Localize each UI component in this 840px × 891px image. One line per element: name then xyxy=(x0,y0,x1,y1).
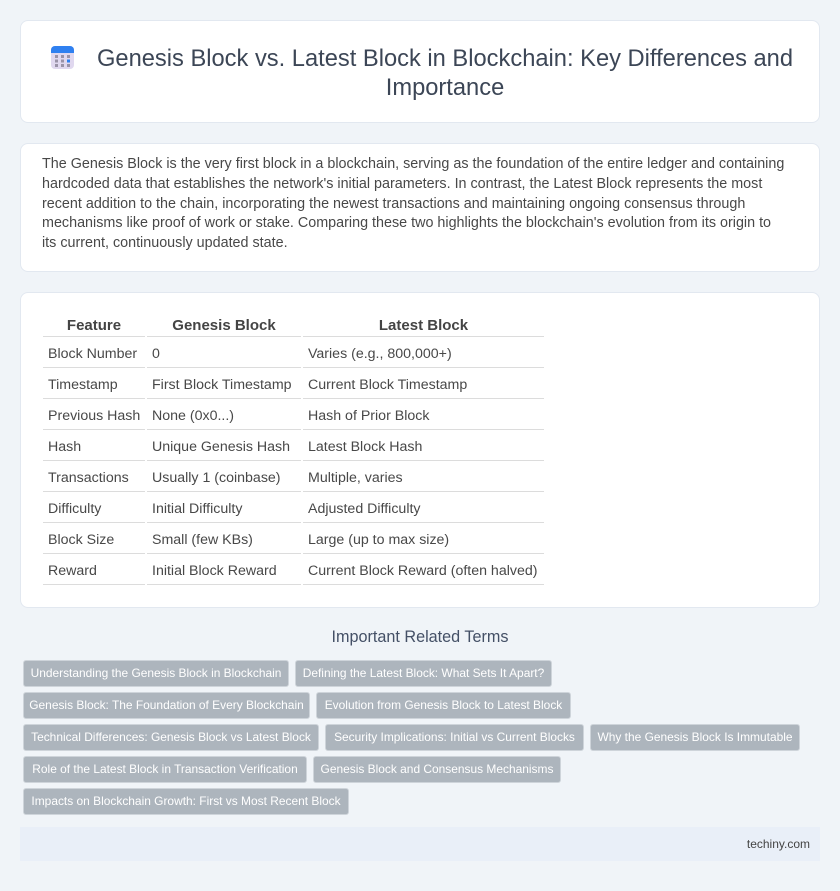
comparison table: Usually 1 (coinbase) xyxy=(152,470,281,486)
intro panel xyxy=(20,143,820,272)
comparison table: Current Block Reward (often halved) xyxy=(308,563,537,579)
comparison table: Block Size xyxy=(48,532,114,548)
table panel xyxy=(20,292,820,608)
comparison table xyxy=(43,317,544,585)
comparison table: Unique Genesis Hash xyxy=(152,439,290,455)
comparison table: Transactions xyxy=(48,470,129,486)
related term tags: Genesis Block and Consensus Mechanisms xyxy=(321,762,553,776)
related term tags: Security Implications: Initial vs Current Blocks xyxy=(334,730,575,744)
related terms heading: Important Related Terms xyxy=(332,628,508,646)
comparison table: Hash of Prior Block xyxy=(308,408,429,424)
comparison table: Adjusted Difficulty xyxy=(308,501,421,517)
comparison table: Difficulty xyxy=(48,501,101,517)
intro text: its current, continuously updated state. xyxy=(42,235,288,251)
intro text: The Genesis Block is the very first block in a blockchain, serving as the foundation of the entire ledger and containing xyxy=(42,156,784,172)
comparison table: Feature xyxy=(67,317,121,334)
related term tags xyxy=(23,660,800,815)
footer bar xyxy=(20,827,820,861)
header panel xyxy=(20,20,820,123)
comparison table: Timestamp xyxy=(48,377,118,393)
comparison table: Reward xyxy=(48,563,97,579)
related term tags: Impacts on Blockchain Growth: First vs Most Recent Block xyxy=(31,794,341,808)
footer source: techiny.com xyxy=(747,837,810,851)
related term tags: Why the Genesis Block Is Immutable xyxy=(597,730,793,744)
related term tags: Genesis Block: The Foundation of Every Blockchain xyxy=(29,698,304,712)
comparison table: Varies (e.g., 800,000+) xyxy=(308,346,452,362)
comparison table: None (0x0...) xyxy=(152,408,234,424)
related term tags: Technical Differences: Genesis Block vs Latest Block xyxy=(31,730,311,744)
related term tags: Role of the Latest Block in Transaction Verification xyxy=(32,762,298,776)
comparison table: Small (few KBs) xyxy=(152,532,253,548)
intro text: hardcoded data that establishes the network's initial parameters. In contrast, the Latest Block represents the most xyxy=(42,176,762,192)
comparison table: Block Number xyxy=(48,346,137,362)
comparison table: Current Block Timestamp xyxy=(308,377,467,393)
comparison table: Latest Block Hash xyxy=(308,439,422,455)
intro text: recent addition to the chain, incorporating the newest transactions and maintaining ongoing consensus through xyxy=(42,196,745,212)
comparison table: Initial Block Reward xyxy=(152,563,277,579)
icon: calendar xyxy=(51,46,74,69)
comparison table: Large (up to max size) xyxy=(308,532,449,548)
title: Importance xyxy=(386,75,504,101)
title: Genesis Block vs. Latest Block in Blockchain: Key Differences and xyxy=(97,46,793,72)
comparison table: Previous Hash xyxy=(48,408,140,424)
title xyxy=(97,46,793,101)
comparison table: Hash xyxy=(48,439,81,455)
related term tags: Understanding the Genesis Block in Blockchain xyxy=(31,666,281,680)
related term tags: Evolution from Genesis Block to Latest Block xyxy=(325,698,562,712)
comparison table: Genesis Block xyxy=(172,317,276,334)
comparison table: 0 xyxy=(152,346,160,362)
comparison table: Multiple, varies xyxy=(308,470,403,486)
intro text: mechanisms like proof of work or stake. Comparing these two highlights the blockchain's evolution from its origin to xyxy=(42,215,771,231)
intro text xyxy=(42,156,784,251)
comparison table: First Block Timestamp xyxy=(152,377,292,393)
comparison table: Latest Block xyxy=(379,317,468,334)
related term tags: Defining the Latest Block: What Sets It Apart? xyxy=(303,666,544,680)
comparison table: Initial Difficulty xyxy=(152,501,242,517)
